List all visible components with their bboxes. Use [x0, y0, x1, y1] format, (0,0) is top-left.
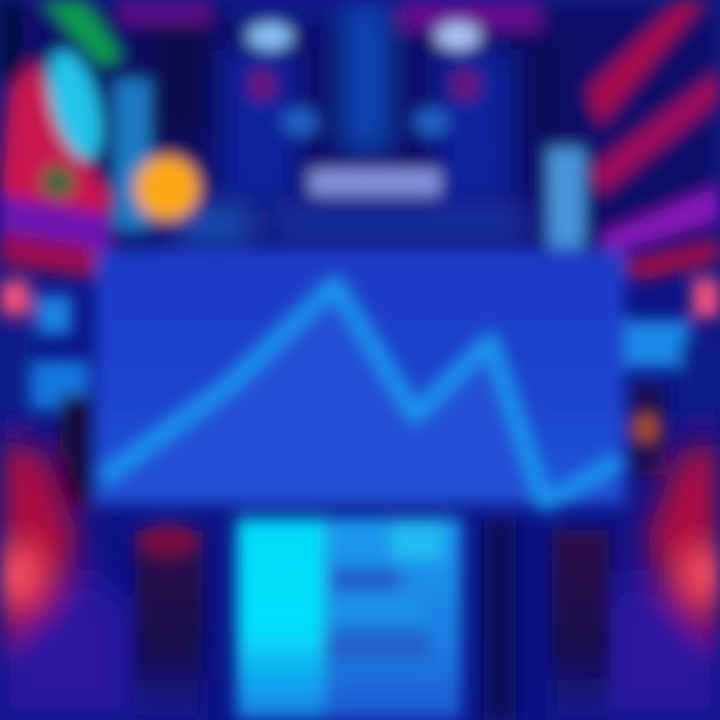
right side strip: pink and blue blobs [620, 278, 720, 475]
bottom panel: cyan column [236, 518, 324, 720]
top blobs: light windows [248, 23, 480, 136]
icon: orange coin [135, 156, 199, 220]
pillar: left dark [135, 524, 203, 720]
right scene: magenta diagonal stripes [588, 0, 720, 282]
top area: dark ceiling [0, 0, 720, 250]
left side strip: pink and blue blobs [0, 280, 92, 505]
bright haze beside coin [175, 205, 255, 245]
heading placeholder: pale blurred title bar [310, 170, 440, 196]
chart area under line [100, 295, 620, 505]
bottom right: red glow [600, 440, 720, 720]
top purple bars [120, 0, 540, 30]
bottom left: red glow [0, 440, 130, 720]
pillar: right dark [484, 520, 610, 720]
line chart [103, 285, 620, 505]
panel: central chart [95, 250, 625, 505]
left scene: red, green and cyan shapes [0, 0, 150, 278]
subheading band [270, 208, 530, 238]
bottom panel: blue data card [320, 518, 462, 720]
light blue column [548, 148, 584, 248]
